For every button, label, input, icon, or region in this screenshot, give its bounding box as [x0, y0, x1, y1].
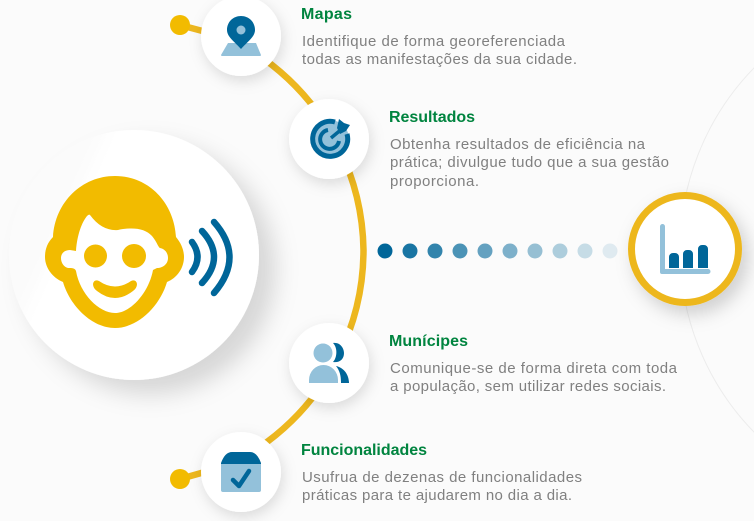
text: Funcionalidades: práticas para te ajudarem no dia a dia.	[302, 487, 572, 504]
text: Mapas: Mapas	[301, 6, 352, 23]
central listening face panel	[9, 130, 259, 380]
text: Funcionalidades	[301, 442, 582, 504]
text: Resultados	[389, 109, 669, 190]
text: Mapas: todas as manifestações da sua cidade.	[302, 51, 577, 68]
text: Munícipes: a população, sem utilizar redes sociais.	[390, 378, 666, 395]
icon: face	[45, 176, 184, 328]
text: Funcionalidades: Usufrua de dezenas de funcionalidades	[302, 469, 582, 486]
text: Funcionalidades: Funcionalidades	[301, 442, 427, 459]
fading dots	[378, 244, 618, 258]
text: Munícipes: Comunique-se de forma direta com toda	[390, 360, 678, 377]
icon: sound waves	[192, 222, 230, 293]
icon: target	[311, 119, 350, 158]
node: Resultados	[289, 99, 369, 179]
text: Resultados: prática; divulgue tudo que a sua gestão	[390, 154, 669, 171]
text: Mapas	[301, 6, 577, 68]
chart badge	[632, 196, 738, 302]
node: Funcionalidades	[201, 432, 281, 512]
node: Mapas	[201, 0, 281, 76]
icon: checked box	[221, 452, 261, 492]
icon: people	[309, 343, 349, 383]
text: Mapas: Identifique de forma georeferenciada	[302, 33, 566, 50]
text: Resultados: Resultados	[389, 109, 475, 126]
text: Munícipes: Munícipes	[389, 333, 468, 350]
icon: map pin	[221, 16, 261, 56]
text: Munícipes	[389, 333, 678, 395]
icon: bar chart	[660, 224, 710, 274]
text: Resultados: Obtenha resultados de eficiência na	[390, 136, 646, 153]
text: Resultados: proporciona.	[390, 173, 479, 190]
node: Munícipes	[289, 323, 369, 403]
timeline arc	[170, 15, 364, 489]
